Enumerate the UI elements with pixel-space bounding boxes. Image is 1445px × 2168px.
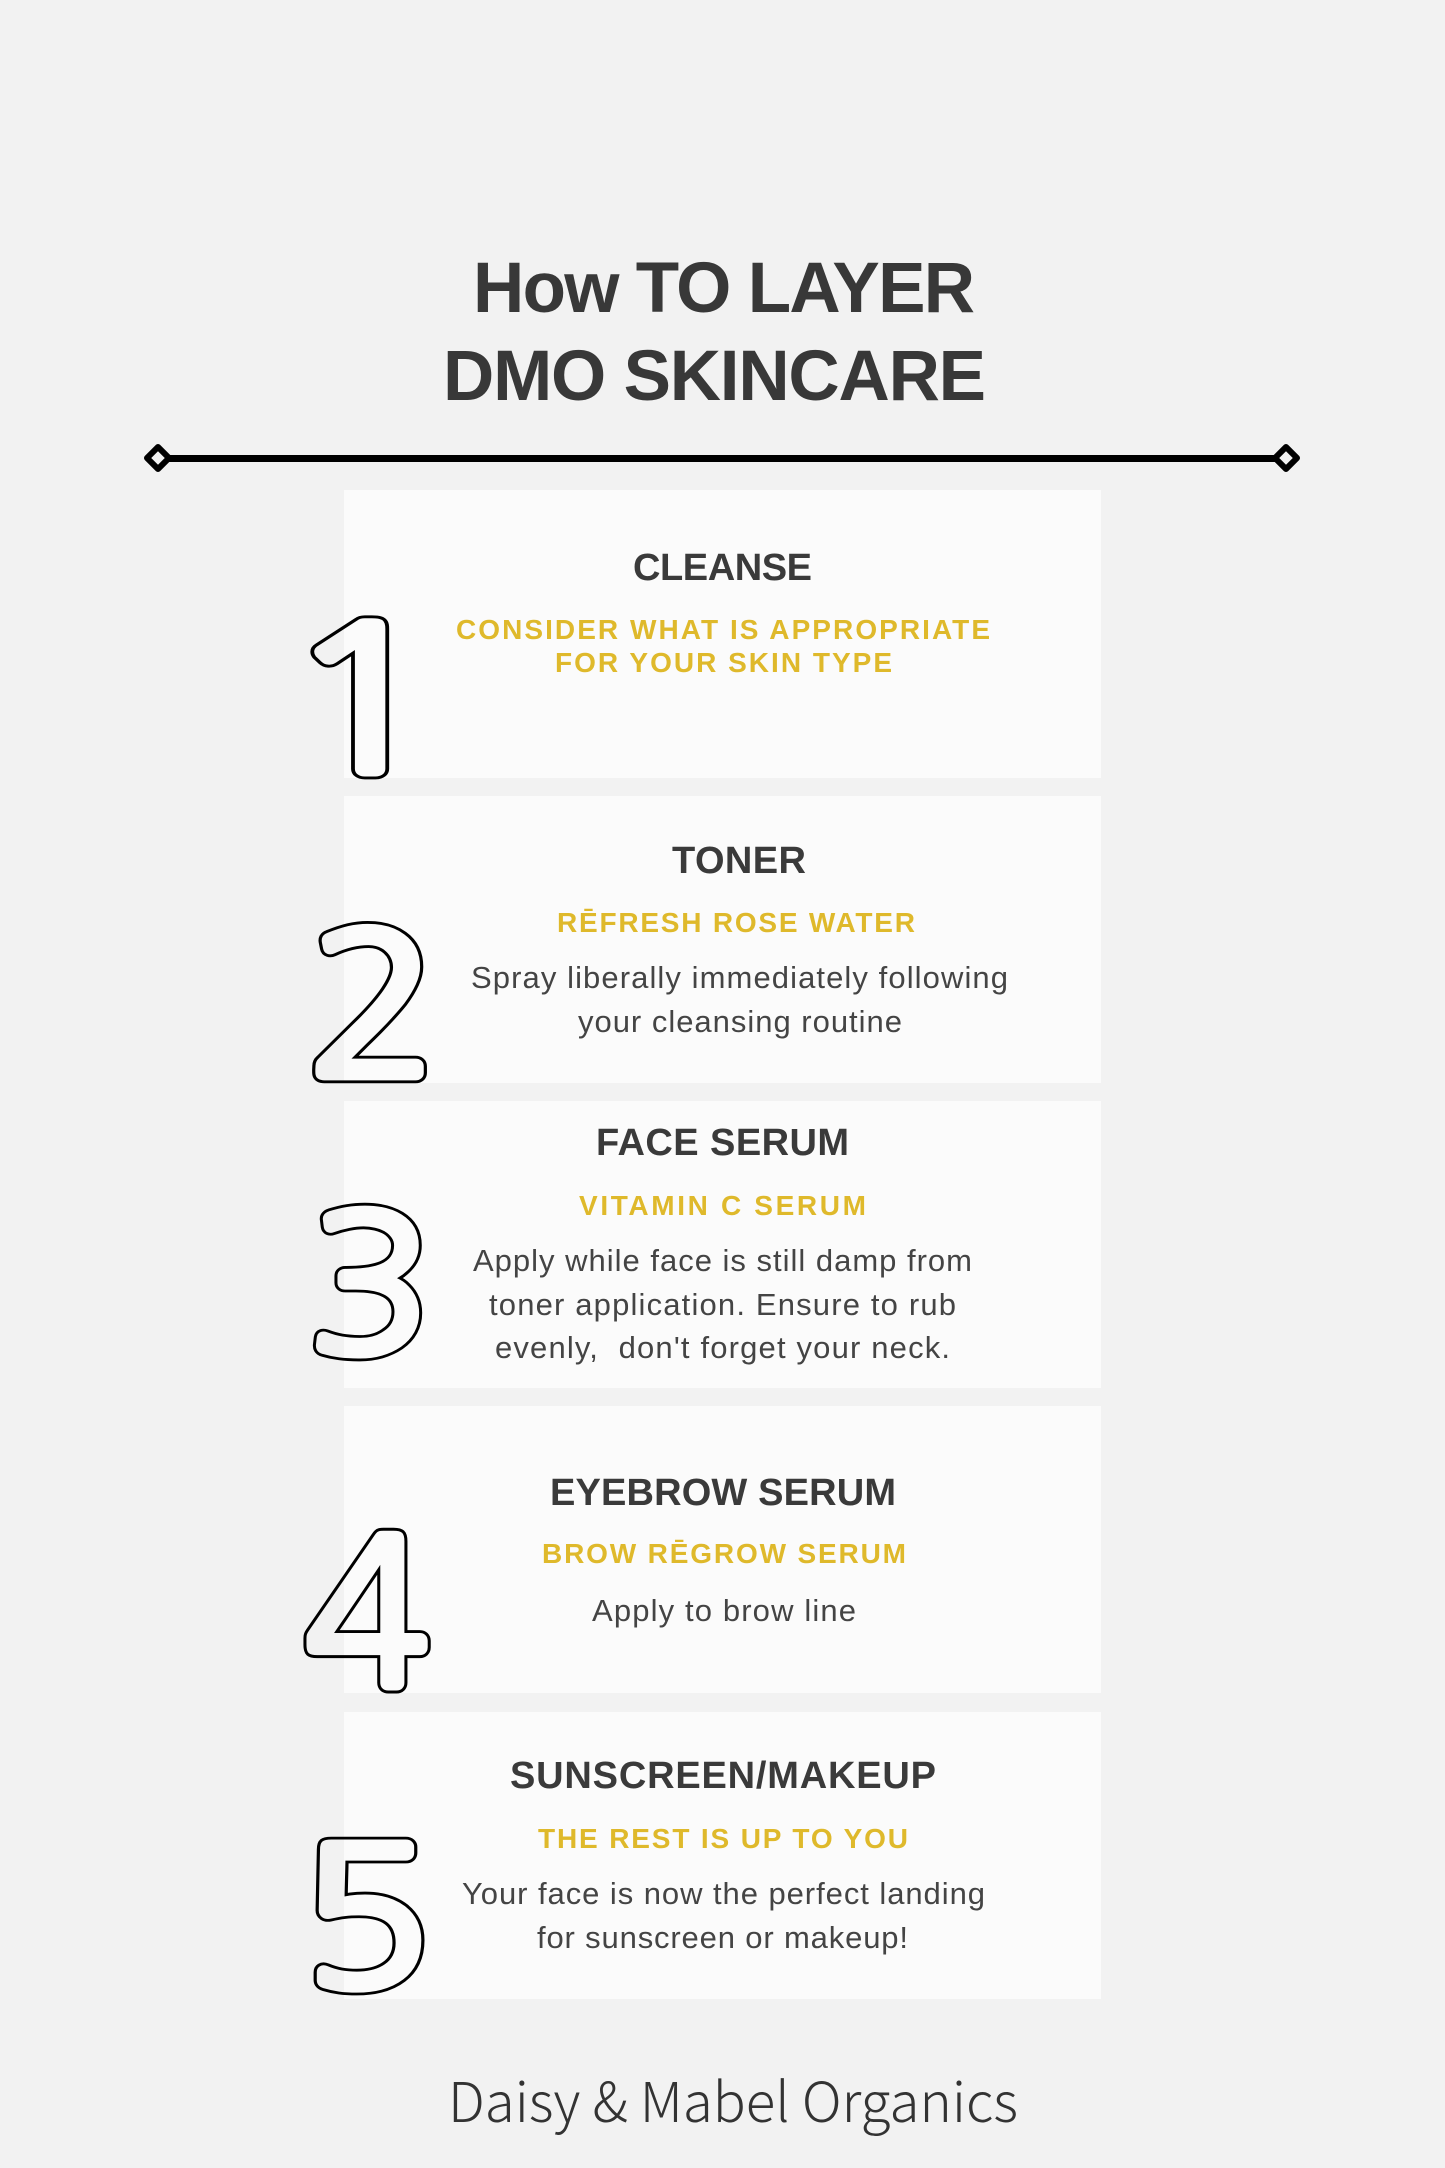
body text: eyebrow serum: Apply to brow line (592, 1593, 856, 1628)
heading: sunscreen and makeup: SUNSCREEN/MAKEUP (510, 1755, 936, 1797)
subheading: skin type: FOR YOUR SKIN TYPE (555, 647, 892, 678)
body text: sunscreen and makeup: for sunscreen or makeup! (537, 1920, 908, 1955)
body text: face serum: Apply while face is still damp from (473, 1243, 972, 1278)
body text: sunscreen and makeup (462, 1876, 985, 1955)
number 3: 3 (308, 1191, 432, 1380)
number 5: 5 (300, 1824, 432, 2014)
title: How TO LAYER (473, 249, 975, 328)
body text: face serum: evenly, don't forget your neck. (495, 1330, 950, 1365)
subheading: refresh rose water: RĒFRESH ROSE WATER (557, 907, 915, 938)
number 4: 4 (305, 1514, 429, 1715)
subheading: skin type (456, 614, 990, 678)
body text: toner (471, 960, 1008, 1039)
body text: face serum (473, 1243, 972, 1365)
body text: face serum: toner application. Ensure to rub (489, 1287, 956, 1322)
subheading: vitamin c serum: VITAMIN C SERUM (579, 1190, 866, 1221)
number 2: 2 (307, 908, 439, 1103)
panel: step 2 toner (344, 796, 1101, 1083)
heading: cleanse: CLEANSE (633, 547, 812, 589)
title: DMO SKINCARE (443, 337, 986, 416)
body text: sunscreen and makeup: Your face is now the perfect landing (462, 1876, 985, 1911)
body text: toner: your cleansing routine (578, 1004, 902, 1039)
footer brand name: Daisy & Mabel Organics (448, 2058, 1018, 2138)
panel: step 5 sunscreen and makeup (344, 1712, 1101, 1999)
subheading: brow regrow serum: BROW RĒGROW SERUM (542, 1538, 906, 1569)
body text: toner: Spray liberally immediately following (471, 960, 1008, 995)
subheading: skin type: CONSIDER WHAT IS APPROPRIATE (456, 614, 990, 645)
title (443, 249, 986, 416)
divider with diamond ends (147, 447, 1297, 469)
outlined step numbers (303, 615, 431, 1996)
panel: step 3 face serum (344, 1101, 1101, 1388)
heading: eyebrow serum: EYEBROW SERUM (550, 1472, 896, 1514)
heading: face serum: FACE SERUM (596, 1122, 849, 1164)
number 1: 1 (284, 602, 440, 800)
panel: step 4 eyebrow serum (344, 1406, 1101, 1693)
subheading: the rest is up to you: THE REST IS UP TO YOU (538, 1823, 908, 1854)
heading: toner: TONER (672, 840, 806, 882)
panel: step 1 cleanse (344, 490, 1101, 778)
